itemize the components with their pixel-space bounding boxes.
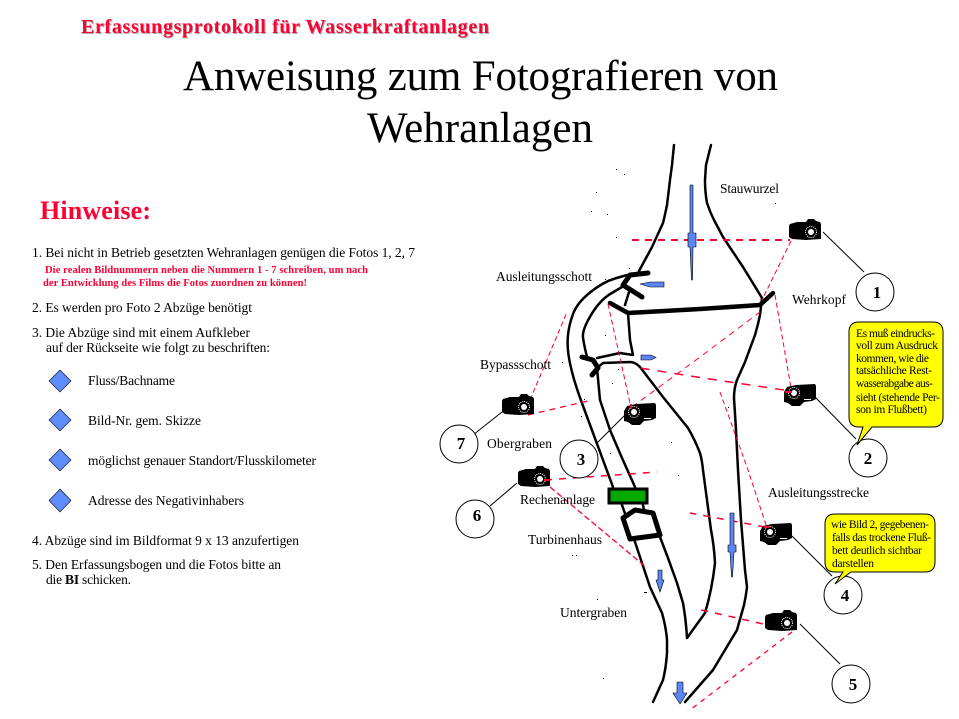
callout: residual water: voll zum Ausdruck: [856, 340, 938, 352]
callout: dry riverbed: [825, 514, 935, 584]
arrow: tailrace: [656, 570, 664, 592]
weir: [610, 293, 773, 313]
arrow: upper river: [688, 185, 696, 280]
numbered circle 1: 1: [873, 283, 881, 302]
diagram labels: Stauwurzel: [720, 181, 779, 196]
main heading: Anweisung zum Fotografieren von: [183, 53, 778, 100]
specks: [562, 169, 776, 679]
callout: dry riverbed: bett deutlich sichtbar: [832, 545, 922, 557]
callout: residual water: Es muß eindrucks-: [856, 328, 935, 340]
red dashed sight lines: [528, 240, 792, 710]
instruction 3: 3. Die Abzüge sind mit einem Aufkleber: [32, 325, 250, 340]
bullet: Adresse: [49, 489, 244, 512]
main heading: Wehranlagen: [367, 105, 593, 152]
callout: residual water: sieht (stehende Per-: [856, 392, 940, 404]
numbered circle 2: 2: [864, 449, 872, 468]
diversion gate: [623, 273, 648, 297]
diagram labels: Obergraben: [487, 436, 552, 451]
diagram labels: Ausleitungsschott: [496, 269, 592, 284]
red note: Die realen Bildnummern neben die Nummern 1 - 7 schreiben, um nach: [45, 265, 368, 276]
main heading: [183, 53, 778, 152]
flow arrows: [640, 185, 736, 704]
numbered circle 3: 3: [577, 450, 585, 469]
bullet: Fluss/Bachname: Fluss/Bachname: [88, 373, 175, 388]
main river banks: [639, 145, 762, 702]
diagram labels: Wehrkopf: [792, 292, 846, 307]
river sketch: [562, 145, 776, 702]
numbered circle 2: [849, 439, 887, 477]
headrace and tailrace banks: [568, 275, 715, 702]
camera 3: [624, 403, 656, 425]
red note: [43, 265, 368, 289]
form title: Erfassungsprotokoll für Wasserkraftanlagen: [81, 16, 489, 38]
instruction 3: auf der Rückseite wie folgt zu beschriften:: [46, 340, 270, 355]
bullet: Standort: [49, 449, 316, 471]
numbered circle 6: [456, 500, 494, 538]
form title: Erfassungsprotokoll für Wasserkraftanlagen: [82, 17, 490, 39]
callout: residual water: wasserabgabe aus-: [856, 378, 933, 390]
numbered circle 7: 7: [457, 434, 466, 453]
callout: dry riverbed: wie Bild 2, gegebenen-: [831, 519, 929, 531]
instruction 3: [32, 325, 270, 355]
camera 2: [784, 384, 816, 406]
instruction 5: die BI schicken.: [46, 572, 131, 587]
instructions text: [32, 245, 415, 587]
callout: dry riverbed: darstellen: [832, 558, 874, 570]
diagram labels: Turbinenhaus: [528, 532, 602, 547]
arrow: bypass: [641, 355, 656, 360]
diagram labels: Rechenanlage: [520, 492, 595, 507]
numbered circle 6: 6: [473, 506, 481, 525]
arrow: outflow: [673, 682, 687, 704]
numbered circle 1: [856, 273, 894, 311]
bullet: Bild-Nr.: Bild-Nr. gem. Skizze: [88, 413, 201, 428]
callout: dry riverbed: falls das trockene Fluß-: [832, 532, 931, 544]
heading: Hinweise: Hinweise:: [40, 196, 151, 225]
bullet: Bild-Nr.: [49, 409, 201, 431]
camera 7: [502, 394, 534, 415]
arrow: diversion: [640, 282, 664, 287]
diagram labels: Bypassschott: [480, 357, 551, 372]
arrow: residual stretch: [728, 513, 736, 577]
instruction 5: 5. Den Erfassungsbogen und die Fotos bitte an: [32, 557, 281, 572]
instruction 5: [32, 557, 281, 587]
numbered circle 4: [824, 576, 862, 614]
camera 5: [765, 610, 797, 631]
bypass gate: [582, 357, 598, 375]
callout: residual water: tatsächliche Rest-: [856, 365, 932, 377]
numbered circle 4: 4: [841, 586, 850, 605]
bullet: Standort: möglichst genauer Standort/Flusskilometer: [88, 453, 316, 468]
numbered circle 5: 5: [849, 675, 857, 694]
diagram labels: Ausleitungsstrecke: [768, 485, 869, 500]
rack structure: [609, 489, 647, 503]
callout: residual water: kommen, wie die: [856, 353, 929, 365]
camera 6: [518, 466, 550, 487]
camera sight marks: [544, 391, 792, 528]
diagram labels: Untergraben: [560, 605, 627, 620]
camera 4: [760, 523, 792, 545]
bullet: Adresse: Adresse des Negativinhabers: [88, 493, 244, 508]
instruction 4: 4. Abzüge sind im Bildformat 9 x 13 anzufertigen: [32, 533, 299, 548]
numbered circle 7: [440, 425, 478, 463]
turbine house: [623, 510, 660, 539]
callout: residual water: [849, 322, 943, 445]
numbered circle 5: [832, 665, 870, 703]
instruction 1: 1. Bei nicht in Betrieb gesetzten Wehranlagen genügen die Fotos 1, 2, 7: [32, 245, 415, 260]
camera 1: [789, 219, 821, 240]
bullet: Fluss/Bachname: [49, 370, 175, 392]
numbered circle 3: [560, 440, 598, 478]
leader lines: [473, 232, 864, 664]
callout: residual water: son im Flußbett): [856, 404, 927, 416]
red note: der Entwicklung des Films die Fotos zuordnen zu können!: [43, 278, 307, 289]
diagram labels: [480, 181, 869, 620]
instruction 2: 2. Es werden pro Foto 2 Abzüge benötigt: [32, 300, 252, 315]
